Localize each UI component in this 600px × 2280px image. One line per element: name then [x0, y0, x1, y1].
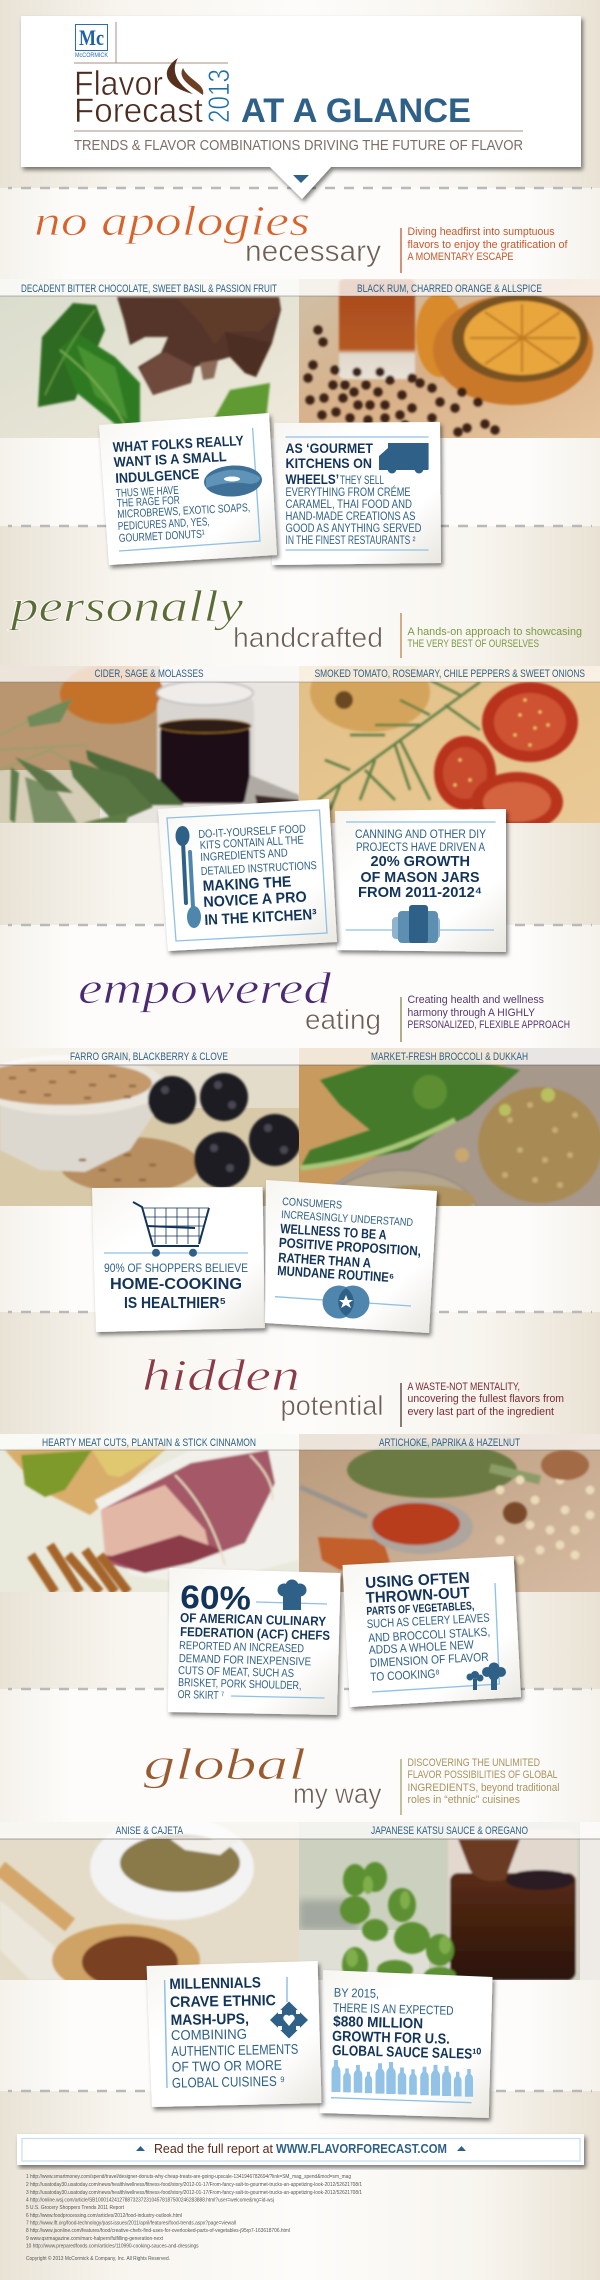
footnotes: [26, 2174, 362, 2262]
footnotes: Copyright © 2013 McCormick & Company, Inc. All Rights Reserved.: [26, 2255, 170, 2262]
photo: rum, orange, allspice: [299, 279, 600, 438]
card: millennials: MILLENNIALS: [169, 1974, 261, 1993]
section description 4: [401, 1381, 564, 1427]
footnotes: 6 http://www.foodprocessing.com/articles/2012/food-industry-outlook.html: [26, 2213, 182, 2219]
heading: global my way: global: [144, 1740, 306, 1789]
footnotes: 5 U.S. Grocery Shoppers Trends 2011 Report: [26, 2205, 124, 2211]
card: DIY food kits: NOVICE A PRO: [203, 889, 307, 911]
card: small indulgence: [99, 413, 277, 565]
card: small indulgence: GOURMET DONUTS¹: [119, 529, 205, 545]
icon: shopping cart: [133, 1202, 209, 1257]
card: ACF chefs: OF AMERICAN CULINARY: [180, 1610, 327, 1629]
card: wellness: POSITIVE PROPOSITION,: [278, 1235, 421, 1259]
card: ACF chefs: 60%: [180, 1578, 251, 1617]
icon: down triangle: [293, 175, 309, 183]
card: small indulgence: THUS WE HAVE: [116, 485, 179, 500]
section description 5: [401, 1757, 560, 1815]
McCormick logo: Mc: [79, 25, 104, 50]
section description 3: harmony through A HIGHLY: [408, 1007, 536, 1019]
card: small indulgence: MICROBREWS, EXOTIC SOAPS,: [117, 502, 250, 521]
card: millennials: AUTHENTIC ELEMENTS: [171, 2041, 298, 2059]
card: thrown-out parts: ADDS A WHOLE NEW: [368, 1637, 475, 1657]
card: mason jars: FROM 2011-2012⁴: [358, 884, 482, 901]
footnotes: 1 http://www.smartmoney.com/spend/travel/designer-donuts-why-cheap-treats-are-going-upscale-1341946782694/?link=SM_mag_spend&mod=sm_mag: [26, 2174, 351, 2180]
card: gourmet kitchens on wheels: KITCHENS ON: [286, 455, 372, 471]
icon: overlapping circles with star: [322, 1286, 370, 1318]
caption strip 3: FARRO GRAIN, BLACKBERRY & CLOVE: [70, 1051, 228, 1063]
caption strip 1: BLACK RUM, CHARRED ORANGE & ALLSPICE: [357, 283, 542, 295]
footnotes: 4 http://online.wsj.com/article/SB10001424127887323723104578187500246283888.html?user=welcome&mg=id-wsj: [26, 2198, 274, 2204]
section description 1: [401, 226, 568, 273]
heading: empowered eating: [78, 964, 381, 1035]
photo: katsu sauce, oregano: [299, 1822, 600, 1983]
section description 4: A WASTE-NOT MENTALITY,: [408, 1381, 520, 1393]
heading: global my way: [144, 1740, 382, 1809]
card: small indulgence: PEDICURES AND, YES,: [118, 516, 210, 533]
card: home cooking: 90% OF SHOPPERS BELIEVE: [104, 1261, 248, 1275]
card: gourmet kitchens on wheels: GOOD AS ANYTHING SERVED: [286, 523, 422, 535]
card: wellness: [265, 1180, 437, 1333]
caption strip 2: CIDER, SAGE & MOLASSES: [94, 668, 204, 680]
card: ACF chefs: [168, 1568, 341, 1715]
card: thrown-out parts: TO COOKING⁸: [370, 1666, 440, 1684]
footnotes: 10 http://www.preparedfoods.com/articles/110990-cooking-sauces-and-dressings: [26, 2244, 199, 2250]
call to action bar: [17, 2134, 584, 2165]
section description 1: A MOMENTARY ESCAPE: [408, 251, 514, 263]
caption strip 4: HEARTY MEAT CUTS, PLANTAIN & STICK CINNAMON: [42, 1437, 256, 1449]
subtitle: TRENDS & FLAVOR COMBINATIONS DRIVING THE FUTURE OF FLAVOR: [74, 137, 523, 154]
card: mason jars: 20% GROWTH: [370, 853, 470, 870]
Flavor Forecast wordmark: 2013: [203, 69, 236, 123]
photo: anise, cajeta: [0, 1822, 299, 1980]
footnotes: 8 http://www.jsonline.com/features/food/creative-chefs-find-uses-for-overlooked-parts-of-vegetables-j95rp7-163618706.html: [26, 2228, 290, 2234]
icon: chef hat: [278, 1580, 306, 1610]
caption strip 1: [0, 279, 600, 296]
Flavor Forecast wordmark: Forecast: [74, 92, 204, 130]
card: gourmet kitchens on wheels: [272, 422, 441, 565]
card: ACF chefs: OR SKIRT ⁷: [178, 1689, 224, 1702]
card: mason jars: CANNING AND OTHER DIY: [355, 829, 486, 841]
photo: meat, plantain, cinnamon: [0, 1434, 299, 1592]
section description 2: THE VERY BEST OF OURSELVES: [408, 638, 539, 650]
card: wellness: RATHER THAN A: [278, 1250, 372, 1271]
caption strip 4: [0, 1434, 600, 1450]
call to action bar: Read the full report at: [154, 2141, 273, 2156]
photo: tomato, rosemary, onion: [299, 666, 600, 823]
card: millennials: OF TWO OR MORE: [172, 2057, 282, 2075]
photo: farro, blackberry: [0, 1048, 301, 1206]
section description 1: Diving headfirst into sumptuous: [408, 226, 555, 238]
heading: personally handcrafted: [7, 582, 383, 653]
card: wellness: CONSUMERS: [282, 1196, 342, 1212]
caption strip 5: [0, 1822, 600, 1840]
photo: broccoli, dukkah: [299, 1048, 600, 1206]
icon: mason jars: [392, 905, 440, 943]
heading: hidden potential: potential: [280, 1390, 384, 1421]
heading: no apologies necessary: [34, 199, 381, 268]
card: small indulgence: WHAT FOLKS REALLY: [112, 432, 245, 455]
caption strip 1: DECADENT BITTER CHOCOLATE, SWEET BASIL & PASSION FRUIT: [21, 283, 277, 295]
card: global sauce sales: [320, 1970, 492, 2118]
caption strip 4: ARTICHOKE, PAPRIKA & HAZELNUT: [379, 1437, 520, 1449]
section description 3: Creating health and wellness: [408, 994, 544, 1006]
card: thrown-out parts: USING OFTEN: [365, 1570, 470, 1592]
caption strip 2: [0, 666, 600, 682]
card: home cooking: [92, 1187, 265, 1332]
card: millennials: GLOBAL CUISINES ⁹: [172, 2073, 285, 2091]
footnotes: 3 http://usatoday30.usatoday.com/news/health/wellness/fitness-food/story/2012-01-17/From-fancy-salt-to-gourmet-trucks-an-appetizing-look-2012/52621708/1: [26, 2190, 362, 2196]
heading: personally handcrafted: handcrafted: [233, 622, 383, 653]
card: gourmet kitchens on wheels: EVERYTHING FROM CRÉME: [286, 486, 411, 499]
card: gourmet kitchens on wheels: CARAMEL, THAI FOOD AND: [286, 499, 412, 511]
card: small indulgence: WANT IS A SMALL: [113, 448, 227, 470]
card: millennials: COMBINING: [171, 2026, 247, 2043]
heading: empowered eating: empowered: [78, 964, 332, 1013]
icon: diamond with heart: [270, 2002, 308, 2038]
icon: food truck: [379, 443, 429, 474]
call to action bar: WWW.FLAVORFORECAST.COM: [276, 2141, 447, 2156]
card: home cooking: IS HEALTHIER⁵: [124, 1295, 226, 1312]
card: mason jars: [335, 809, 506, 952]
section description 3: [401, 994, 570, 1042]
card: small indulgence: THE RAGE FOR: [117, 495, 180, 510]
card: thrown-out parts: [342, 1556, 521, 1707]
card: thrown-out parts: AND BROCCOLI STALKS,: [368, 1625, 490, 1645]
caption strip 5: ANISE & CAJETA: [116, 1825, 184, 1837]
card: thrown-out parts: PARTS OF VEGETABLES,: [366, 1600, 475, 1618]
footnotes: 7 http://www.ift.org/food-technology/past-issues/2011/april/features/food-trends.aspx?page=viewall: [26, 2220, 236, 2226]
section description 2: A hands-on approach to showcasing: [408, 626, 582, 638]
card: gourmet kitchens on wheels: WHEELS’: [286, 471, 339, 487]
footnotes: 9 www.qsrmagazine.com/marc-halpern/fulfilling-generation-next: [26, 2236, 163, 2242]
McCormick logo: McCORMICK: [75, 53, 108, 59]
caption strip 5: JAPANESE KATSU SAUCE & OREGANO: [371, 1825, 528, 1837]
icon: broccoli: [466, 1662, 506, 1690]
Flavor Forecast wordmark: Flavor: [74, 65, 163, 103]
icon: spoons: [176, 826, 201, 928]
card: millennials: [147, 1961, 322, 2107]
icon: sauce bottles: [332, 2060, 473, 2097]
heading: no apologies necessary: necessary: [245, 235, 381, 268]
card: mason jars: OF MASON JARS: [360, 869, 480, 886]
heading: global my way: my way: [293, 1778, 382, 1809]
card: home cooking: HOME-COOKING: [110, 1276, 242, 1293]
card: DIY food kits: KITS CONTAIN ALL THE: [200, 835, 304, 852]
photo: cider, sage, molasses: [0, 664, 299, 823]
card: wellness: WELLNESS TO BE A: [280, 1221, 387, 1243]
section description 1: flavors to enjoy the gratification of: [408, 239, 568, 251]
panel: header card: [21, 16, 581, 199]
card: ACF chefs: FEDERATION (ACF) CHEFS: [180, 1624, 331, 1643]
card: ACF chefs: BRISKET, PORK SHOULDER,: [178, 1677, 302, 1692]
card: mason jars: PROJECTS HAVE DRIVEN A: [356, 842, 485, 854]
heading: hidden potential: [142, 1351, 384, 1421]
card: DIY food kits: INGREDIENTS AND: [200, 847, 288, 864]
section description 5: FLAVOR POSSIBILITIES OF GLOBAL: [408, 1769, 558, 1781]
card: gourmet kitchens on wheels: HAND-MADE CREATIONS AS: [286, 511, 416, 523]
section description 5: DISCOVERING THE UNLIMITED: [408, 1757, 540, 1769]
section description 4: uncovering the fullest flavors from: [408, 1393, 564, 1405]
card: gourmet kitchens on wheels: IN THE FINEST RESTAURANTS ²: [286, 535, 416, 547]
card: gourmet kitchens on wheels: THEY SELL: [340, 475, 384, 487]
card: global sauce sales: BY 2015,: [334, 1986, 379, 2001]
title: AT A GLANCE: [241, 92, 471, 130]
photo: chocolate, basil: [0, 279, 299, 438]
card: small indulgence: INDULGENCE: [115, 466, 200, 486]
heading: no apologies necessary: no apologies: [34, 199, 310, 245]
heading: hidden potential: hidden: [142, 1351, 300, 1400]
card: wellness: MUNDANE ROUTINE⁶: [277, 1263, 395, 1285]
caption strip 3: MARKET-FRESH BROCCOLI & DUKKAH: [371, 1051, 528, 1063]
Flavor Forecast wordmark: [74, 58, 236, 130]
card: ACF chefs: DEMAND FOR INEXPENSIVE: [179, 1653, 311, 1668]
heading: empowered eating: eating: [305, 1004, 381, 1035]
card: global sauce sales: $880 MILLION: [333, 2014, 423, 2032]
card: ACF chefs: CUTS OF MEAT, SUCH AS: [178, 1665, 294, 1680]
card: thrown-out parts: SUCH AS CELERY LEAVES: [366, 1611, 490, 1631]
card: DIY food kits: DETAILED INSTRUCTIONS: [201, 860, 317, 878]
card: DIY food kits: MAKING THE: [202, 873, 292, 895]
footnotes: 2 http://usatoday30.usatoday.com/news/health/wellness/fitness-food/story/2012-01-17/From-fancy-salt-to-gourmet-trucks-an-appetizing-look-2012/52621708/1: [26, 2182, 362, 2188]
caption strip 3: [0, 1048, 600, 1066]
heading: personally handcrafted: personally: [7, 582, 244, 631]
card: DIY food kits: IN THE KITCHEN³: [204, 906, 317, 929]
icon: donut: [203, 464, 263, 498]
section description 4: every last part of the ingredient: [408, 1406, 554, 1418]
card: global sauce sales: GLOBAL SAUCE SALES¹⁰: [332, 2043, 481, 2063]
card: gourmet kitchens on wheels: AS ‘GOURMET: [286, 440, 373, 456]
section description 5: roles in “ethnic” cuisines: [408, 1794, 520, 1806]
card: wellness: INCREASINGLY UNDERSTAND: [281, 1209, 413, 1229]
card: global sauce sales: THERE IS AN EXPECTED: [333, 2001, 454, 2018]
McCormick logo: [75, 24, 108, 59]
card: millennials: MASH-UPS,: [170, 2011, 249, 2029]
section description 2: [401, 613, 582, 658]
card: global sauce sales: GROWTH FOR U.S.: [332, 2029, 450, 2048]
card: ACF chefs: REPORTED AN INCREASED: [179, 1640, 304, 1655]
card: thrown-out parts: DIMENSION OF FLAVOR: [369, 1650, 489, 1670]
section description 5: INGREDIENTS, beyond traditional: [408, 1782, 560, 1794]
card: DIY food kits: DO-IT-YOURSELF FOOD: [198, 823, 306, 841]
photo: artichoke, paprika, hazelnut: [299, 1434, 600, 1592]
card: thrown-out parts: THROWN-OUT: [365, 1585, 471, 1607]
card: millennials: CRAVE ETHNIC: [170, 1992, 276, 2011]
card: DIY food kits: [158, 799, 337, 951]
